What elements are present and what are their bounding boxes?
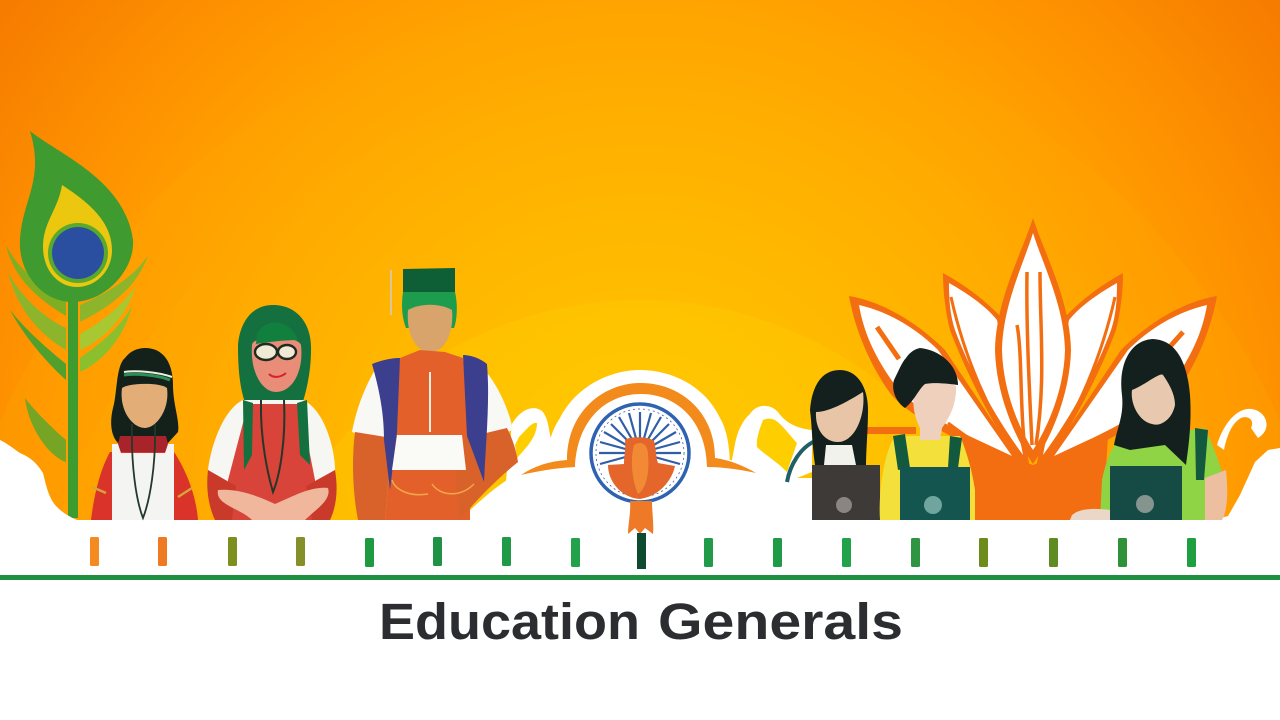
- hand: [1070, 509, 1110, 520]
- face: [122, 384, 167, 428]
- figure: student with hair bun and yellow vest: [880, 348, 975, 520]
- icon: peacock feather: [6, 131, 148, 518]
- figure: woman with glasses and green headscarf: [207, 305, 337, 520]
- sleeve accents: [92, 487, 192, 497]
- neck and face: [408, 305, 452, 352]
- hair: [111, 348, 178, 443]
- zipper: [429, 372, 431, 432]
- smile: [269, 373, 286, 377]
- white chest panel: [392, 435, 466, 470]
- ribbon: [628, 501, 653, 534]
- illustration: white cloud and ground band: [0, 370, 1280, 720]
- orange torch: [608, 437, 675, 499]
- green band: [402, 292, 457, 328]
- white collar: [824, 445, 856, 465]
- green cap: [256, 323, 298, 344]
- white apron: [112, 444, 174, 520]
- green hood: [238, 305, 311, 455]
- figure: girl with white apron: [91, 348, 198, 520]
- pocket lines: [392, 480, 474, 495]
- round glasses: [255, 344, 296, 360]
- long hair: [1114, 339, 1191, 465]
- face: [816, 392, 863, 442]
- cap: [403, 268, 455, 292]
- neck and face: [913, 382, 956, 440]
- chakra spokes: [599, 412, 681, 464]
- white sleeves: [208, 400, 335, 488]
- hair bun: [893, 348, 958, 408]
- backpack strap: [787, 441, 815, 482]
- laptop: [900, 467, 970, 520]
- green shirt: [1100, 428, 1224, 520]
- icon: lotus flower: [849, 218, 1217, 520]
- yellow shirt: [880, 436, 975, 520]
- chakra ring: [591, 404, 689, 502]
- backpack straps: [372, 358, 400, 490]
- white shirt: [352, 365, 513, 445]
- arm: [1205, 470, 1227, 520]
- red dress: [224, 404, 318, 520]
- clasped hands: [218, 488, 329, 520]
- graduation tassel: [390, 270, 392, 315]
- green strands: [243, 400, 310, 470]
- lotus base: [960, 436, 1108, 520]
- face: [1132, 375, 1175, 425]
- emblem: Ashoka chakra medal: [521, 383, 756, 534]
- lotus left petals: [849, 273, 1030, 468]
- lotus band behind students: [866, 427, 916, 434]
- title: Generals: [658, 593, 903, 650]
- laptop: [812, 465, 880, 520]
- orange jacket: [385, 350, 470, 520]
- collar: [116, 436, 170, 452]
- figure: student with dark laptop: [787, 370, 880, 520]
- headband: [124, 371, 172, 377]
- red dress: [91, 452, 198, 520]
- orange arch: [521, 383, 756, 475]
- dark green straps: [893, 434, 962, 470]
- necklace: [132, 424, 155, 518]
- laptop: [1110, 466, 1182, 520]
- left arm: [353, 432, 392, 520]
- timeline baseline: [0, 575, 1280, 580]
- figure: boy with green cap and backpack: [352, 268, 518, 520]
- figure: student with long hair and green shirt: [1070, 339, 1227, 520]
- lotus right petals: [1036, 273, 1217, 468]
- title: [379, 593, 903, 650]
- title: Education: [379, 593, 640, 650]
- lotus centre petal: [995, 218, 1071, 464]
- lanyard: [261, 400, 284, 492]
- timeline ticks: [90, 533, 1196, 569]
- pink face: [252, 338, 301, 392]
- right arm: [455, 428, 518, 520]
- red lower sleeves: [207, 470, 236, 520]
- hair: [810, 370, 868, 465]
